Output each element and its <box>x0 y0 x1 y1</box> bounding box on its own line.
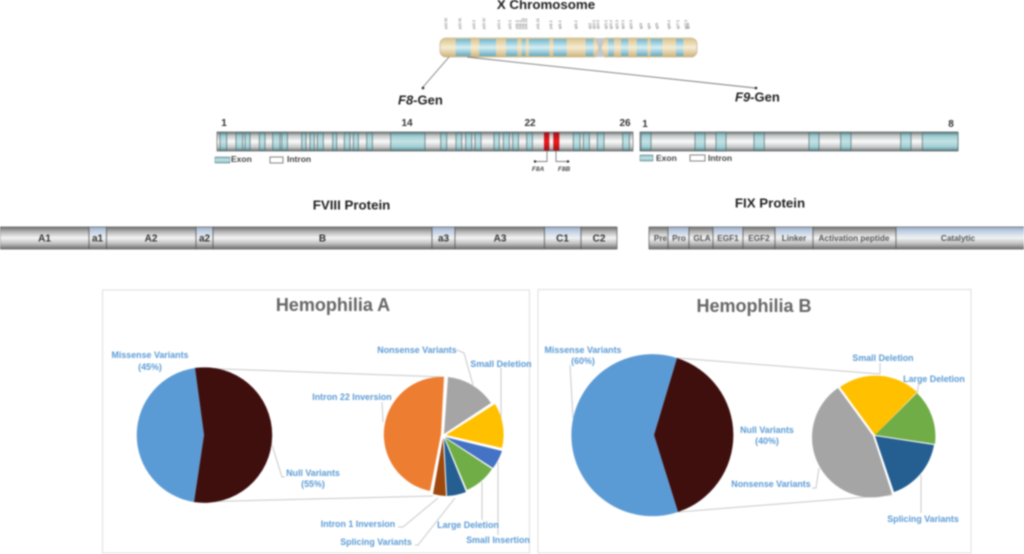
slice labels: Nonsense Variants <box>377 345 457 355</box>
F8A and F8B inversion markers: F8A <box>532 166 544 173</box>
FIX protein domain bar: Pre <box>654 234 668 243</box>
F8 legend: Intron <box>287 154 311 164</box>
slice labels: Intron 22 Inversion <box>312 392 392 402</box>
chromosome band labels: p22.31 <box>458 18 462 29</box>
chromosome band labels: q11.1 <box>558 20 562 29</box>
chromosome band labels: p11.23 <box>521 18 525 29</box>
FVIII protein domain bar <box>0 227 617 249</box>
chromosome band labels: q13.1 <box>592 20 596 29</box>
chromosome band labels: q13.3 <box>596 20 600 29</box>
label: F8-Gen: F8-Gen <box>398 92 443 108</box>
chromosome band labels: q22.1 <box>621 20 625 29</box>
chromosome band labels: q25 <box>655 23 659 29</box>
chromosome band labels: q27.1 <box>676 20 680 29</box>
chromosome band labels: q21.2 <box>609 20 613 29</box>
chromosome band labels: q11.2 <box>574 20 578 29</box>
F9 exon numbers: 1 <box>642 119 648 130</box>
FIX protein domain bar: Pro <box>672 234 686 243</box>
F8A and F8B inversion markers <box>532 151 570 173</box>
slice labels: Small Deletion <box>852 353 914 363</box>
FVIII protein domain bar: C1 <box>556 234 569 244</box>
FIX protein domain bar <box>649 227 1024 249</box>
chromosome ideogram <box>440 38 697 57</box>
slice labels: Null Variants <box>286 468 340 478</box>
slice labels: Small Insertion <box>466 535 530 545</box>
chromosome band labels <box>444 18 690 29</box>
chromosome band labels: p22.2 <box>472 20 476 29</box>
FIX protein domain bar: GLA <box>693 234 711 243</box>
main pie: missense vs null <box>137 367 272 503</box>
slice labels: Splicing Variants <box>340 537 412 547</box>
F9 legend <box>640 153 732 163</box>
F8 exon numbers: 1 <box>221 118 227 129</box>
slice labels: Large Deletion <box>437 520 499 530</box>
chromosome band labels: p21.1 <box>508 20 512 29</box>
chromosome band labels: q27.3 <box>684 20 688 29</box>
FVIII protein domain bar: A1 <box>38 234 51 244</box>
chromosome band labels: q21.1 <box>604 20 608 29</box>
FVIII protein domain bar: C2 <box>593 234 606 244</box>
chromosome band labels: p21.3 <box>497 20 501 29</box>
slice labels: (60%) <box>571 356 595 366</box>
F8 gene bar <box>217 132 633 151</box>
chromosome band labels: q12 <box>588 23 592 29</box>
slice labels: Small Deletion <box>470 359 532 369</box>
chromosome band labels: q21.3 <box>615 20 619 29</box>
F8A and F8B inversion markers: F8B <box>558 166 570 173</box>
panel: Hemophilia A <box>102 290 532 553</box>
connector lines between pies and leader lines <box>194 350 501 545</box>
chromosome band labels: p11.21 <box>536 18 540 29</box>
detail pie: null variant breakdown <box>812 376 935 497</box>
chromosome band labels: p11.22 <box>524 18 528 29</box>
connector lines between pies and leader lines <box>570 358 921 513</box>
panel: Hemophilia B <box>538 290 971 553</box>
heading: Hemophilia A: Hemophilia A <box>276 295 390 315</box>
F9 legend: Intron <box>708 153 732 163</box>
F8 exon numbers: 14 <box>401 118 413 129</box>
slice labels: Null Variants <box>740 425 794 435</box>
chromosome band labels: q26.1 <box>667 20 671 29</box>
chromosome band labels: p11.3 <box>518 20 522 29</box>
chromosome band labels: p22.12 <box>482 18 486 29</box>
chromosome band labels: p11.4 <box>515 20 519 29</box>
slice labels: Nonsense Variants <box>731 479 811 489</box>
arrow: chromosome to F9 gene <box>467 57 757 89</box>
chromosome band labels: q23 <box>639 23 643 29</box>
slice labels <box>545 345 965 524</box>
chromosome band labels: q28 <box>686 23 690 29</box>
F9 exon numbers: 8 <box>948 119 954 130</box>
heading: FVIII Protein: FVIII Protein <box>313 198 390 212</box>
slice labels: (55%) <box>301 479 325 489</box>
chromosome band labels: p11.1 <box>549 20 553 29</box>
heading: Hemophilia B: Hemophilia B <box>696 296 812 316</box>
slice labels: Missense Variants <box>112 350 189 360</box>
F8 exon numbers: 22 <box>524 118 536 129</box>
FIX protein domain bar: Linker <box>782 234 807 243</box>
chromosome band labels: q24 <box>647 23 651 29</box>
FIX protein domain bar: EGF2 <box>748 234 770 243</box>
label: F9-Gen: F9-Gen <box>735 90 780 104</box>
heading: FIX Protein: FIX Protein <box>735 196 805 210</box>
chromosome band labels: p22.33 <box>444 18 448 29</box>
detail pie: null variant breakdown <box>384 377 504 496</box>
slice labels: (40%) <box>755 436 779 446</box>
FVIII protein domain bar: A2 <box>145 234 158 244</box>
FVIII protein domain bar: a1 <box>92 234 103 244</box>
F8 legend <box>215 154 311 164</box>
FVIII protein domain bar: a2 <box>199 234 210 244</box>
F9 gene bar <box>640 132 958 151</box>
FIX protein domain bar: Activation peptide <box>819 234 890 243</box>
FVIII protein domain bar: a3 <box>438 234 449 244</box>
slice labels: Missense Variants <box>545 345 622 355</box>
chromosome band labels: q22.3 <box>629 20 633 29</box>
slice labels: Large Deletion <box>903 374 965 384</box>
arrow: chromosome to F8 gene <box>422 57 449 89</box>
F9 legend: Exon <box>656 153 677 163</box>
FVIII protein domain bar: A3 <box>494 234 507 244</box>
FIX protein domain bar: EGF1 <box>717 234 739 243</box>
slice labels: Splicing Variants <box>887 514 959 524</box>
slice labels <box>112 345 532 547</box>
FIX protein domain bar: Catalytic <box>941 234 976 243</box>
FVIII protein domain bar: B <box>319 234 326 244</box>
slice labels: Intron 1 Inversion <box>321 519 395 529</box>
F8 exon numbers: 26 <box>619 118 631 129</box>
F8 legend: Exon <box>231 154 252 164</box>
F9 exon numbers <box>642 119 954 130</box>
slice labels: (45%) <box>138 362 162 372</box>
F8 exon numbers <box>221 118 631 129</box>
main pie: missense vs null <box>571 354 733 516</box>
